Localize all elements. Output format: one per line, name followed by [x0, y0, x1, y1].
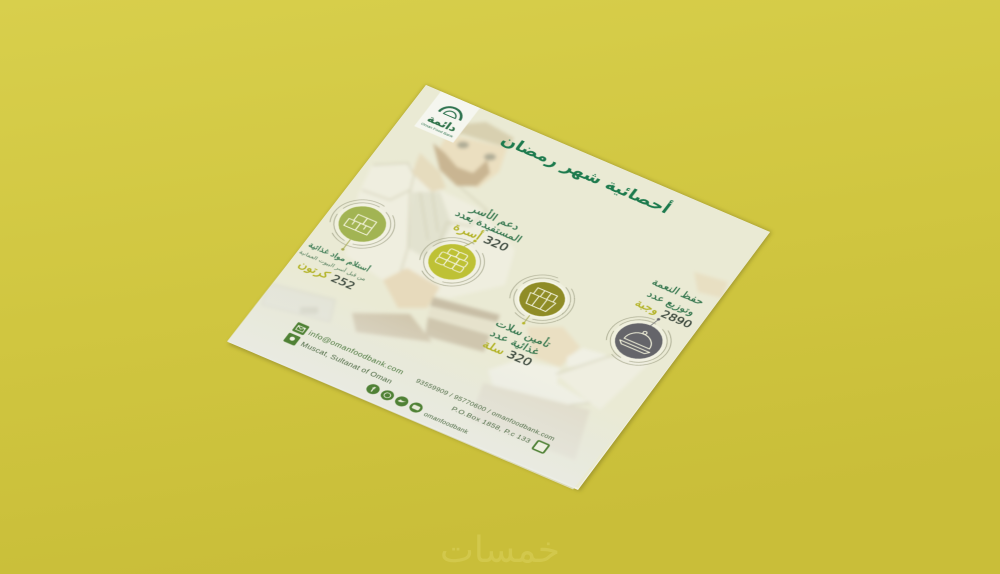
logo plate: [414, 91, 480, 143]
icon: location pin: [283, 332, 301, 346]
robe: [345, 162, 515, 298]
label: وتوزيع عدد: [644, 289, 697, 318]
label: أستلام مواد غذائية: [307, 240, 372, 273]
card face: [228, 85, 770, 488]
beard: [433, 143, 490, 186]
label: [477, 316, 555, 370]
address: Muscat, Sultanat of Oman: [299, 340, 394, 385]
email: info@omanfoodbank.com: [307, 329, 406, 376]
icon: mail: [292, 322, 310, 335]
flyer content in flyer plane: [234, 86, 765, 481]
label: [444, 198, 532, 257]
watermark: خمسات: [440, 530, 560, 571]
logo word: دائمة: [425, 113, 460, 134]
left arm skin: [383, 268, 440, 308]
face: [440, 136, 506, 186]
logo: [414, 91, 480, 143]
stat: food items: [288, 190, 413, 294]
label: [288, 239, 375, 294]
icon: basket: [523, 287, 560, 313]
right hand: [527, 327, 580, 367]
icon: boxes: [344, 212, 377, 235]
label: حفظ النعمة: [649, 277, 706, 307]
rings: [495, 266, 586, 336]
social icons: f: [368, 385, 377, 394]
right shoulder object: [695, 273, 727, 298]
title: أحصائية شهر رمضان: [497, 130, 676, 217]
icon: food cloche: [618, 325, 661, 355]
label: [632, 277, 711, 331]
bottom white fade, in flyer plane: [227, 264, 633, 489]
social icons: [364, 382, 425, 414]
eyes: [457, 142, 496, 160]
table: [300, 306, 319, 315]
flyer card: [227, 85, 770, 490]
footer contacts: [274, 322, 559, 465]
neck: [412, 153, 446, 192]
label: غذائية عدد: [488, 328, 542, 358]
right arm: [560, 356, 649, 408]
label: 320 سلة: [480, 338, 535, 369]
box bands: [430, 297, 500, 322]
logo dome icon: [439, 104, 466, 120]
phone and website: 93559909 / 95770600 / omanfoodbank.com: [414, 378, 556, 443]
icon: stacked parcels: [435, 246, 472, 273]
PO box: P.O.Box 1858, P.c 133: [450, 405, 533, 445]
robe outline: [363, 162, 487, 270]
turban band: [460, 121, 514, 148]
logo tagline: Oman Food Bank: [420, 121, 455, 139]
label: من قبل أسر البيوت العمانية: [298, 248, 368, 282]
social handle: omanfoodbank: [422, 411, 470, 436]
card shadow: [228, 85, 772, 491]
sleeve and cuff: [490, 360, 585, 404]
circle: [330, 200, 395, 248]
rings: [594, 305, 685, 374]
rings: [408, 226, 499, 295]
stat: baskets: [470, 266, 591, 370]
label: دعم الأسر: [467, 201, 523, 233]
circle: [420, 238, 485, 286]
label: تأمين سلات: [493, 316, 555, 350]
stat: families: [408, 197, 532, 300]
label: 252 كرتون: [295, 258, 358, 293]
card paper: [228, 85, 770, 490]
circle: [606, 317, 671, 365]
robe stripes: [409, 192, 451, 256]
rings: [314, 191, 407, 262]
circle: [510, 275, 575, 323]
label: 320 أسرة: [450, 220, 512, 254]
icon: PO box: [532, 440, 549, 453]
background illustration: man holding food boxes: [300, 121, 727, 440]
lower box: [481, 385, 588, 440]
label: 2890 وجبة: [632, 297, 695, 331]
stat: meals: [594, 275, 711, 375]
label: المستفيدة بعدد: [453, 208, 524, 245]
